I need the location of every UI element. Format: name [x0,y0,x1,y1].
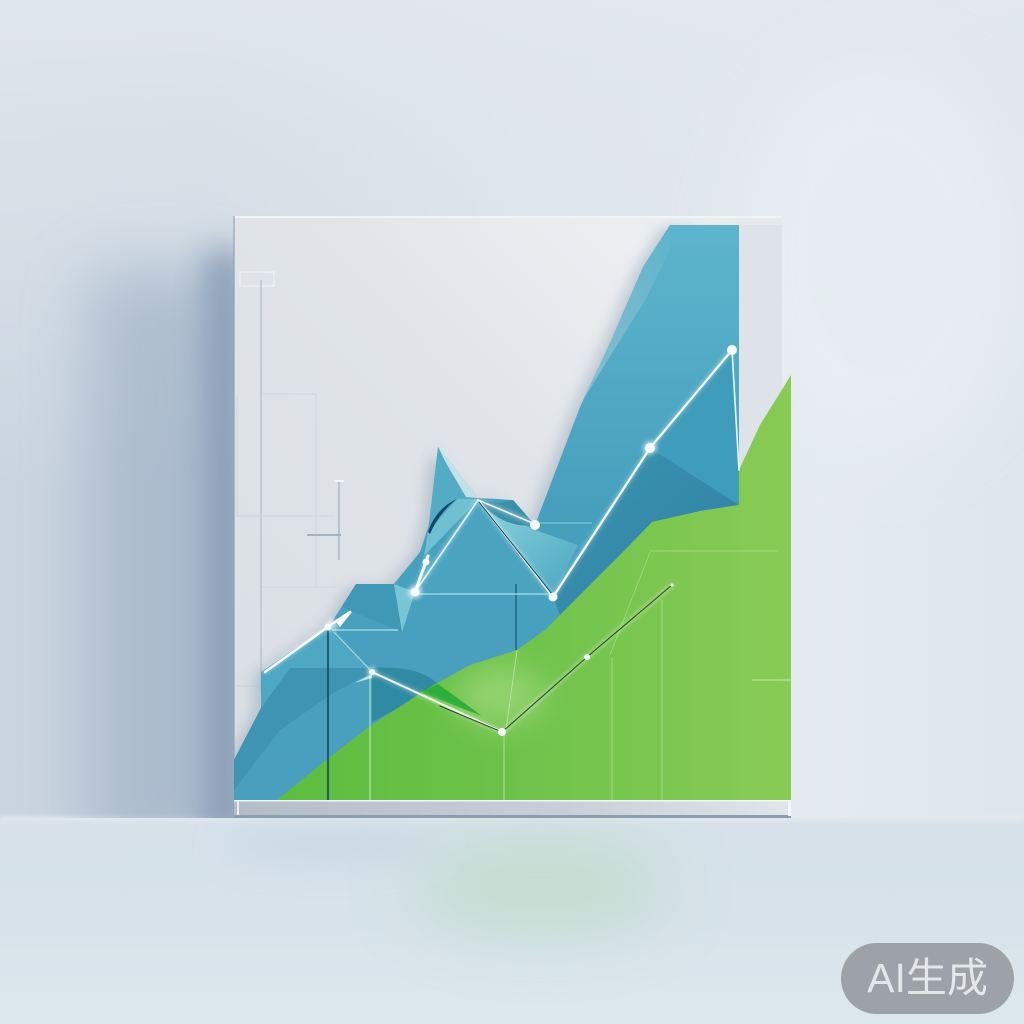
white chart panel [233,216,782,816]
upper light facet [583,225,670,400]
data point markers [324,345,737,736]
glow in the green valley [455,665,545,725]
right dark facet [650,350,739,505]
left origami fold [342,584,402,632]
lower left facets [234,668,372,790]
blue area series [234,225,739,800]
small ridge facet [478,500,535,526]
central mountain facet [415,498,553,597]
AI generated badge [841,943,1014,1014]
dark line series on green [372,585,672,732]
glowing blue line series [265,350,739,672]
lower dark facet [553,448,739,615]
shadow behind blue area [226,228,692,783]
peak facet [428,447,478,532]
top edge right [650,550,778,552]
AI generated badge: AI生成 [867,955,988,1001]
vertical drop lines [328,523,592,800]
background floor [0,816,1024,1024]
faint grid and axes on panel [236,272,344,690]
bright valley facet [482,504,578,597]
dark overlap wedge [372,667,440,722]
green area series [277,375,791,800]
panel shadow [90,250,245,870]
chart base plinth [234,800,791,818]
dark green wedge [420,684,482,716]
